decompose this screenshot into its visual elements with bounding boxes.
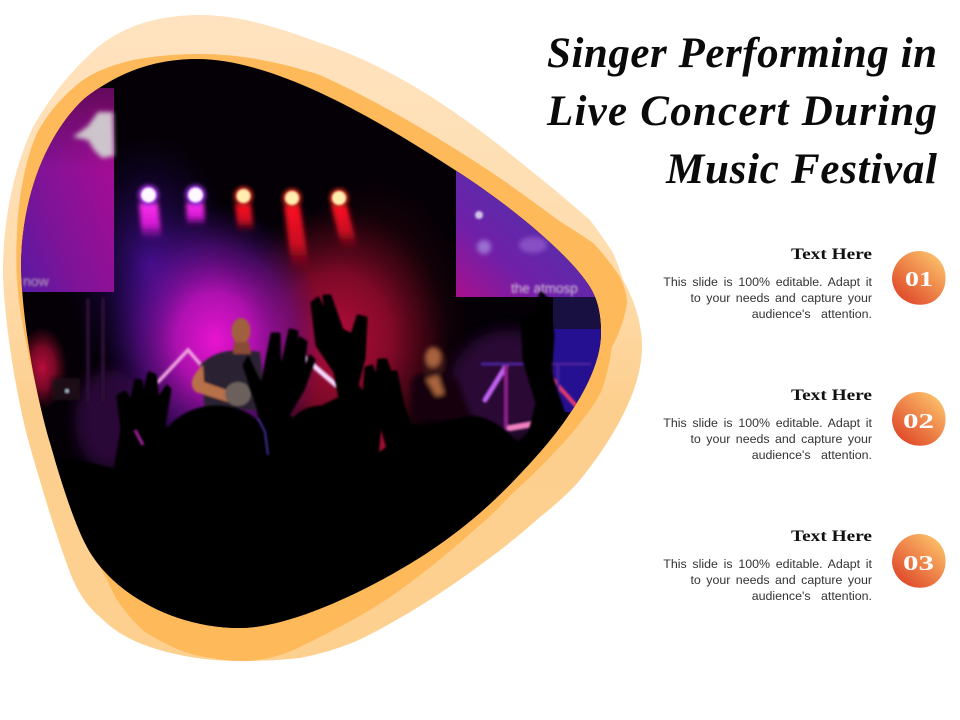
title [546, 30, 937, 193]
item 02 description [663, 416, 873, 462]
right video screen: the atmosp [511, 281, 578, 296]
title: Live Concert During [546, 88, 937, 135]
crowd silhouette with raised hands [54, 290, 568, 628]
stage lighting haze [28, 150, 601, 468]
item 03 description: This slide is 100% editable. Adapt it [663, 557, 873, 571]
item 02 heading: Text Here [791, 387, 872, 404]
item 01 description [663, 275, 873, 321]
item 03 description: to your needs and capture your [690, 573, 872, 587]
item 01 description: audience's attention. [752, 307, 872, 321]
item 03 heading: Text Here [791, 528, 872, 545]
item 01 heading: Text Here [791, 246, 872, 263]
right video screen [456, 170, 606, 297]
stage lights [138, 185, 348, 207]
item 02 [663, 387, 946, 462]
left video screen [21, 88, 118, 292]
item 01 description: This slide is 100% editable. Adapt it [663, 275, 873, 289]
background blob: darker orange inner shape [16, 54, 627, 661]
title: Singer Performing in [547, 30, 937, 77]
item 02 description: This slide is 100% editable. Adapt it [663, 416, 873, 430]
glow slivers among the crowd [135, 418, 386, 455]
item 02 description: audience's attention. [752, 448, 872, 462]
performer: guitarist [192, 318, 266, 410]
left video screen: now [23, 273, 50, 289]
item 02 number badge: 02 [903, 409, 934, 433]
item 01 number badge [892, 251, 946, 305]
item 03 description: audience's attention. [752, 589, 872, 603]
item 03 number badge [892, 534, 946, 588]
item 01 description: to your needs and capture your [690, 291, 872, 305]
item 03 number badge: 03 [903, 551, 934, 575]
item 02 description: to your needs and capture your [690, 432, 872, 446]
performer: singer [412, 347, 472, 420]
title: Music Festival [665, 146, 937, 193]
item 01 [663, 246, 946, 321]
photo: singer performing on concert stage [21, 59, 601, 628]
background blob: pale outer shape [3, 15, 642, 661]
spotlight beams [139, 203, 358, 272]
item 03 description [663, 557, 873, 603]
item 03 [663, 528, 946, 603]
light bars and neon stage shapes [28, 300, 604, 430]
item 02 number badge [892, 392, 946, 446]
item 01 number badge: 01 [905, 267, 933, 291]
